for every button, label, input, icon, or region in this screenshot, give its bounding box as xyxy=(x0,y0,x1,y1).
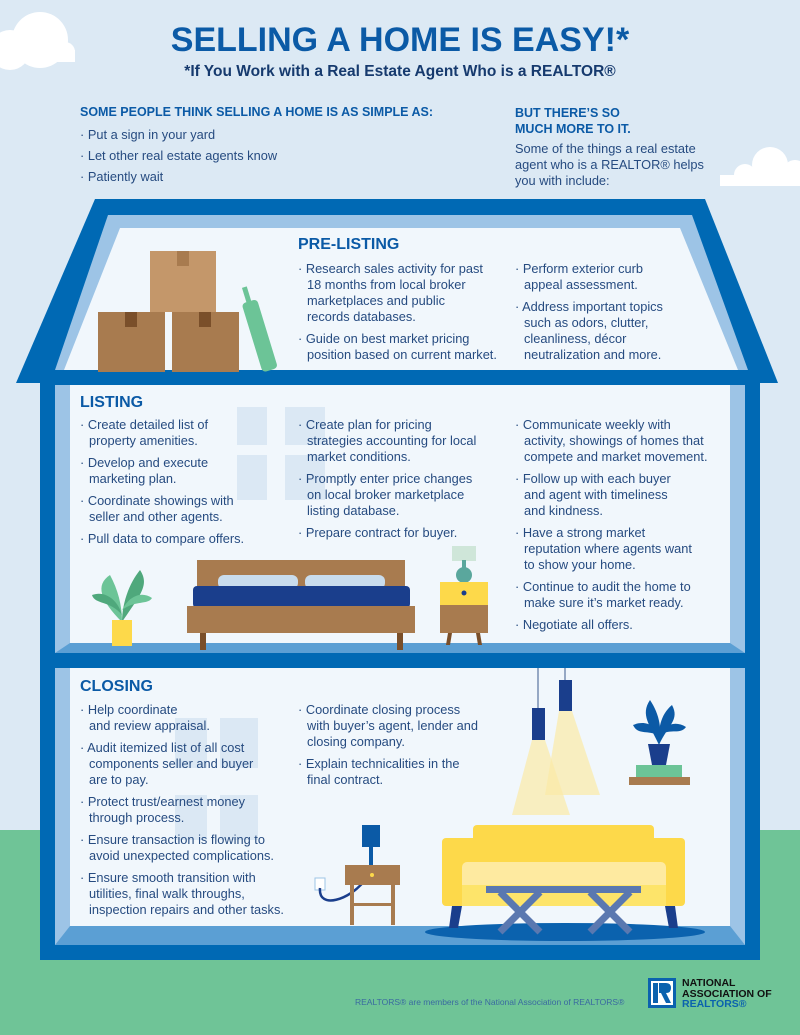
right intro text xyxy=(515,141,704,188)
listing col1 xyxy=(82,417,244,546)
closing col2: Coordinate closing process xyxy=(306,702,460,717)
left intro bullets: Let other real estate agents know xyxy=(88,148,277,163)
closing col2: Explain technicalities in the xyxy=(306,756,459,771)
left intro heading: SOME PEOPLE THINK SELLING A HOME IS AS SIMPLE AS: xyxy=(80,105,433,119)
pre-listing col1: position based on current market. xyxy=(307,347,497,362)
house walls xyxy=(40,370,760,960)
listing col2: market conditions. xyxy=(307,449,411,464)
listing col1: Coordinate showings with xyxy=(88,493,234,508)
pre-listing col2: Address important topics xyxy=(522,299,663,314)
closing col2: closing company. xyxy=(307,734,405,749)
closing col1 xyxy=(82,702,284,917)
listing col3: and agent with timeliness xyxy=(524,487,668,502)
listing col1: seller and other agents. xyxy=(89,509,223,524)
listing col2 xyxy=(300,417,476,540)
closing col1: are to pay. xyxy=(89,772,149,787)
pre-listing col2: such as odors, clutter, xyxy=(524,315,648,330)
pre-listing col2 xyxy=(516,261,663,362)
logo text: REALTORS® xyxy=(682,998,747,1010)
closing col1: inspection repairs and other tasks. xyxy=(89,902,284,917)
closing col1: Protect trust/earnest money xyxy=(88,794,245,809)
house roof xyxy=(16,199,778,383)
listing col3: Follow up with each buyer xyxy=(523,471,671,486)
left intro bullets: Put a sign in your yard xyxy=(88,127,215,142)
listing col2: listing database. xyxy=(307,503,399,518)
listing col3: reputation where agents want xyxy=(524,541,692,556)
closing col1: Ensure smooth transition with xyxy=(88,870,256,885)
listing col3: and kindness. xyxy=(524,503,603,518)
listing col1: marketing plan. xyxy=(89,471,176,486)
listing col3: Have a strong market xyxy=(523,525,645,540)
cloud left xyxy=(0,12,75,70)
listing col3: Continue to audit the home to xyxy=(523,579,691,594)
faded windows xyxy=(175,407,325,840)
closing col1: components seller and buyer xyxy=(89,756,253,771)
rug xyxy=(425,923,705,941)
pre-listing col2: appeal assessment. xyxy=(524,277,638,292)
listing col1: Create detailed list of xyxy=(88,417,208,432)
pre-listing col1: 18 months from local broker xyxy=(307,277,466,292)
listing col3 xyxy=(516,417,708,632)
pre-listing col1: Research sales activity for past xyxy=(306,261,483,276)
bed xyxy=(187,560,415,650)
closing col1: utilities, final walk throughs, xyxy=(89,886,245,901)
listing col3: Negotiate all offers. xyxy=(523,617,633,632)
shelf plant xyxy=(629,700,690,785)
rolled rug xyxy=(237,285,278,373)
listing col3: activity, showings of homes that xyxy=(524,433,704,448)
listing col2: Create plan for pricing xyxy=(306,417,432,432)
listing panel xyxy=(55,385,745,653)
side table lamp outlet xyxy=(315,825,400,925)
closing col1: avoid unexpected complications. xyxy=(89,848,274,863)
pre-listing col1: records databases. xyxy=(307,309,416,324)
listing heading: LISTING xyxy=(80,394,143,411)
plant listing xyxy=(92,570,152,646)
right intro heading: BUT THERE’S SO xyxy=(515,106,620,120)
ground xyxy=(0,830,800,1035)
closing panel xyxy=(55,668,745,945)
closing col2 xyxy=(300,702,478,787)
listing col2: Promptly enter price changes xyxy=(306,471,472,486)
pre-listing col2: Perform exterior curb xyxy=(523,261,643,276)
pre-listing col2: neutralization and more. xyxy=(524,347,661,362)
right intro text: Some of the things a real estate xyxy=(515,141,696,156)
pre-listing col1: marketplaces and public xyxy=(307,293,445,308)
right intro heading xyxy=(515,106,631,136)
listing col3: compete and market movement. xyxy=(524,449,708,464)
listing col3: to show your home. xyxy=(524,557,636,572)
right intro text: agent who is a REALTOR® helps xyxy=(515,157,704,172)
footer note: REALTORS® are members of the National Association of REALTORS® xyxy=(355,997,624,1007)
closing col1: Ensure transaction is flowing to xyxy=(88,832,265,847)
closing col1: through process. xyxy=(89,810,184,825)
subtitle: *If You Work with a Real Estate Agent Who is a REALTOR® xyxy=(184,63,616,80)
listing col2: on local broker marketplace xyxy=(307,487,464,502)
pre-listing heading: PRE-LISTING xyxy=(298,236,399,253)
nightstand with lamp xyxy=(440,546,488,645)
closing col2: final contract. xyxy=(307,772,383,787)
title: SELLING A HOME IS EASY!* xyxy=(171,21,629,59)
closing heading: CLOSING xyxy=(80,678,153,695)
cloud right xyxy=(720,147,800,186)
NAR logo mark xyxy=(648,978,676,1008)
pre-listing col1 xyxy=(300,261,497,362)
hanging lamps xyxy=(512,668,600,815)
listing col2: Prepare contract for buyer. xyxy=(306,525,457,540)
sofa xyxy=(442,825,685,928)
right intro heading: MUCH MORE TO IT. xyxy=(515,122,631,136)
logo text: ASSOCIATION OF xyxy=(682,988,772,1000)
listing col2: strategies accounting for local xyxy=(307,433,476,448)
listing col1: Develop and execute xyxy=(88,455,208,470)
listing col1: Pull data to compare offers. xyxy=(88,531,244,546)
left intro bullets xyxy=(82,127,278,184)
closing col1: Audit itemized list of all cost xyxy=(87,740,244,755)
closing col1: and review appraisal. xyxy=(89,718,210,733)
right intro text: you with include: xyxy=(515,173,610,188)
pre-listing col2: cleanliness, décor xyxy=(524,331,626,346)
listing col1: property amenities. xyxy=(89,433,198,448)
pre-listing col1: Guide on best market pricing xyxy=(306,331,469,346)
coffee table xyxy=(500,892,630,932)
closing col1: Help coordinate xyxy=(88,702,177,717)
boxes xyxy=(98,251,239,372)
listing col3: Communicate weekly with xyxy=(523,417,671,432)
logo text xyxy=(682,977,772,1010)
closing col2: with buyer’s agent, lender and xyxy=(307,718,478,733)
left intro bullets: Patiently wait xyxy=(88,169,163,184)
logo text: NATIONAL xyxy=(682,977,735,989)
listing col3: make sure it’s market ready. xyxy=(524,595,684,610)
